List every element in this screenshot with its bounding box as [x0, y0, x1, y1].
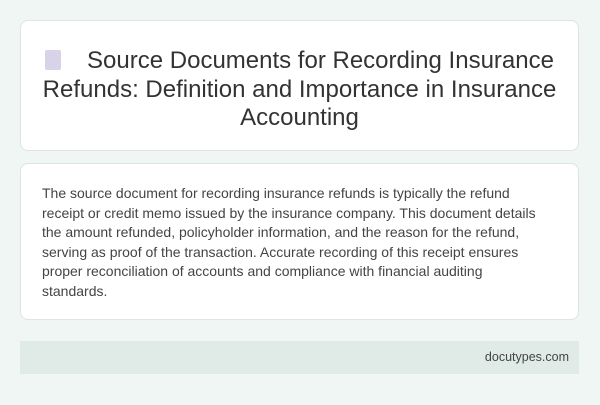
text block: The source document for recording insurance refunds is typically the refund receipt or credit memo issued by the insurance company. This document details the amount refunded, policyholder information, and the reason for the refund, serving as proof of the transaction. Accurate recording of this receipt ensures proper reconciliation of accounts and compliance with financial auditing standards.: [42, 185, 536, 298]
panel: description: [20, 163, 579, 320]
footer text: docutypes.com: [485, 350, 569, 364]
panel: title: [20, 20, 579, 151]
title: Source Documents for Recording Insurance Refunds: Definition and Importance in Insurance Accounting: [43, 47, 556, 131]
icon: receipt: [45, 50, 61, 70]
footer bar: [20, 341, 579, 374]
